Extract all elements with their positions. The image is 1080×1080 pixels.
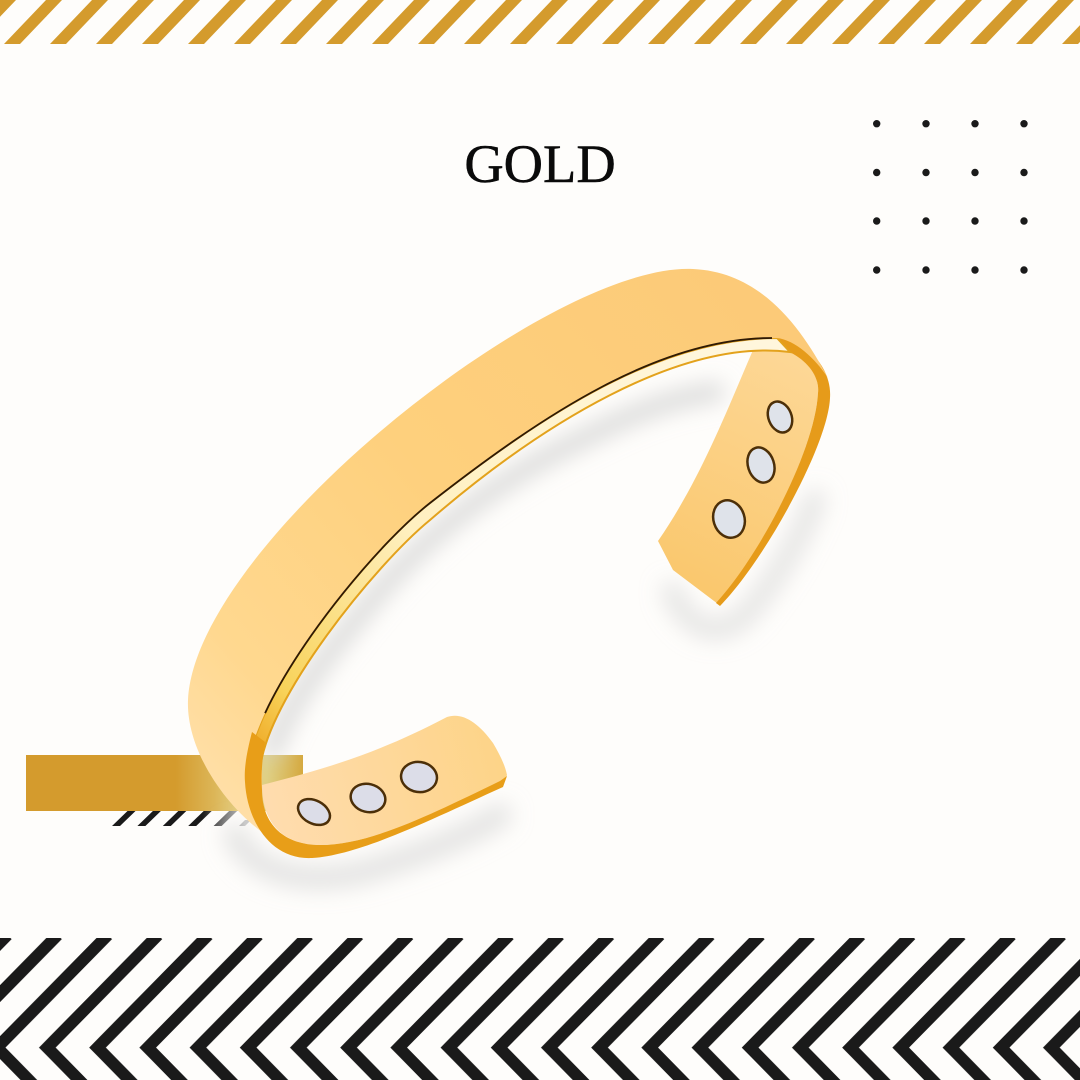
band lip highlight [247,338,790,770]
right end rim [716,337,830,606]
dark edge line [247,338,772,770]
gold accent bar [26,755,303,811]
right end magnets [708,398,797,542]
dot grid decoration [873,120,1028,274]
right end inner surface [658,345,818,604]
soft shadow [235,392,815,878]
left end magnets [294,760,439,830]
left end inner surface [262,716,507,845]
title: GOLD [464,133,616,194]
bottom black chevron band [0,938,1080,1080]
small black stripes under bar [112,811,251,826]
gold magnetic bangle [188,269,830,878]
left end rim [245,732,507,858]
top gold diagonal stripe band [0,0,1080,44]
band outer face [188,269,828,832]
